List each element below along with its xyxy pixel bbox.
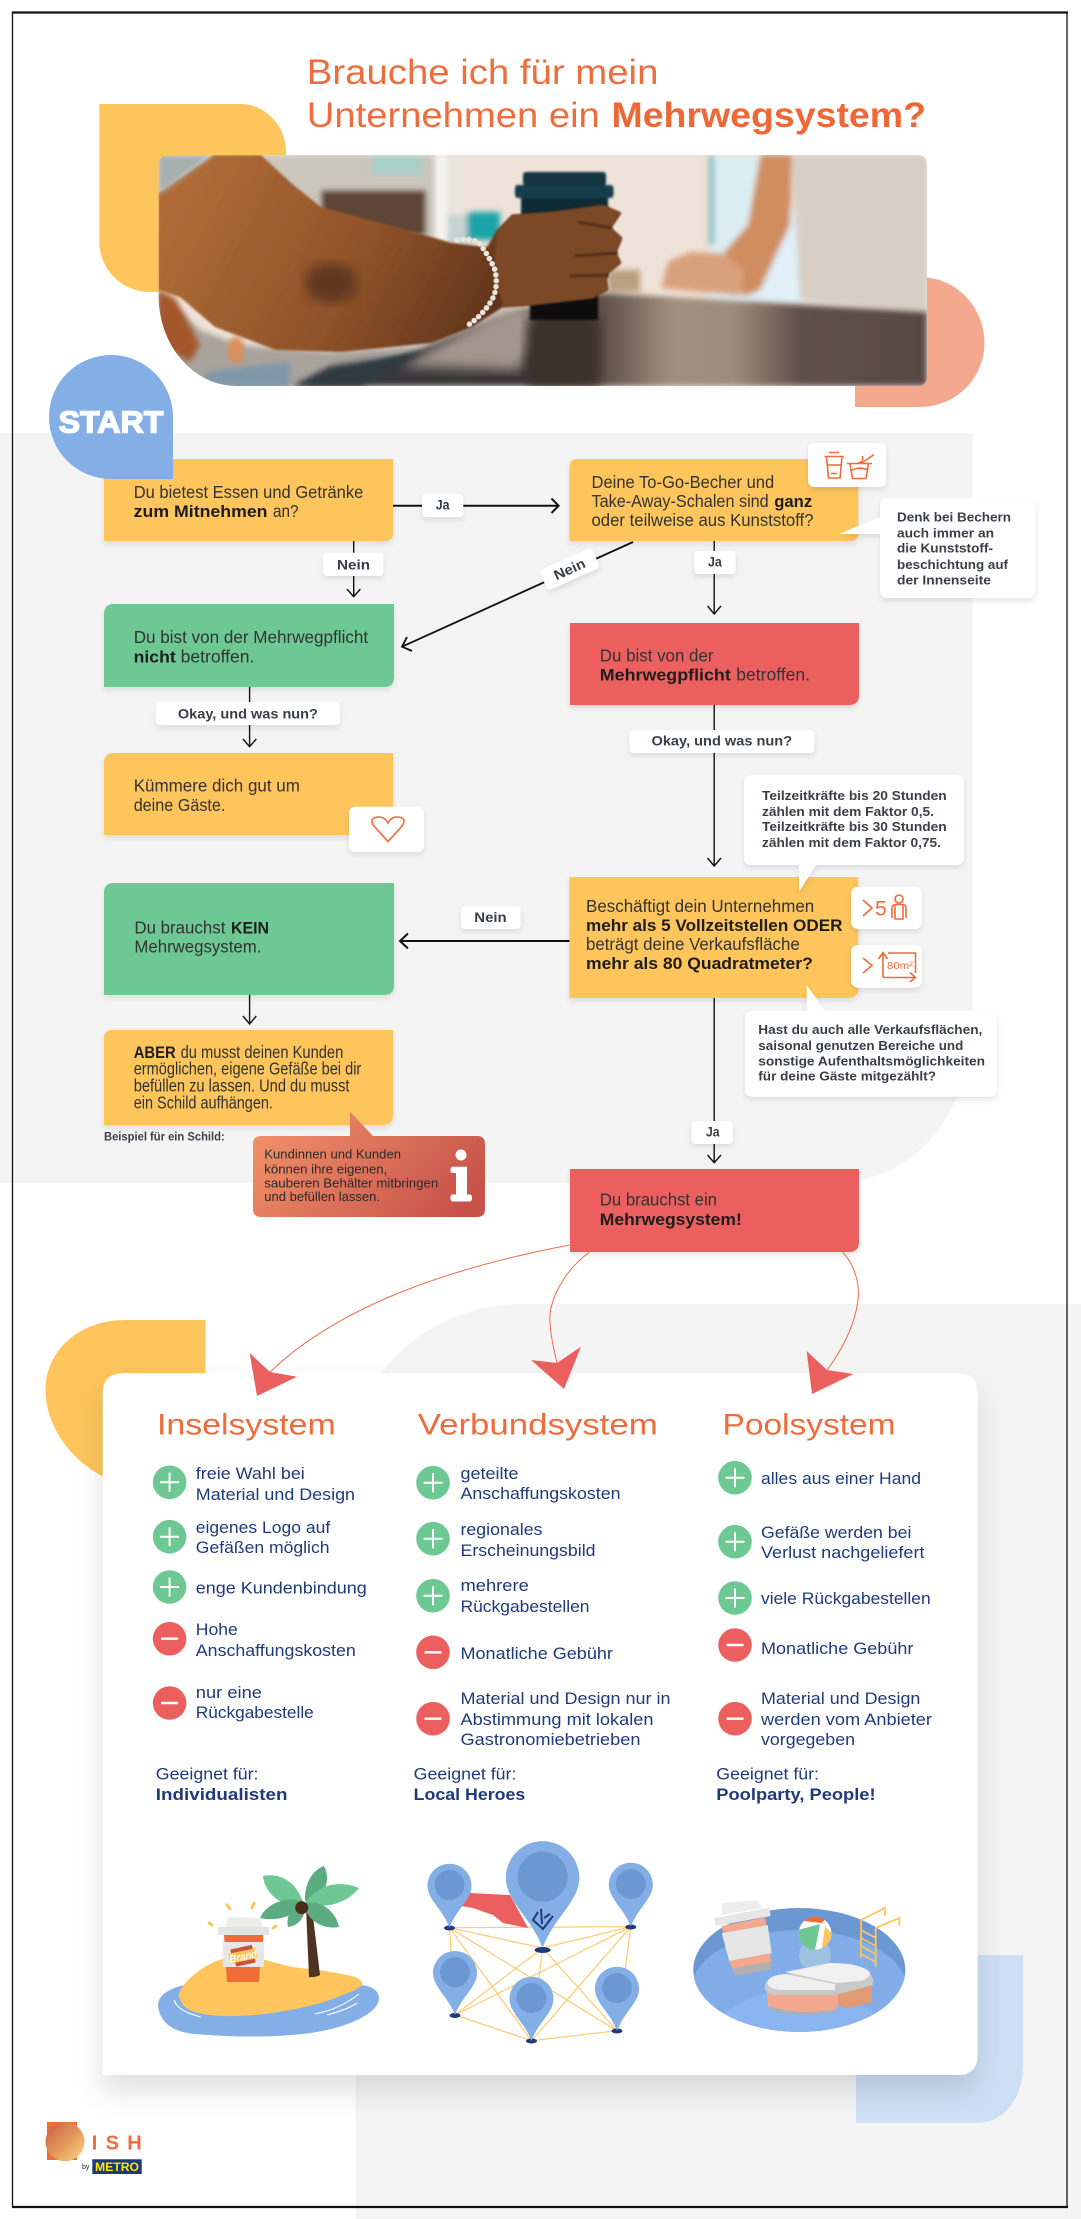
box: Mehrwegpflicht betroffen: Du bist von der [600, 646, 714, 666]
photo: hand holding reusable cup [158, 155, 928, 388]
heading: Verbundsystem [418, 1408, 658, 1441]
con: Gebühr: Monatliche Gebühr [460, 1644, 613, 1663]
box: Mehrwegpflicht betroffen [570, 623, 859, 705]
suitable for: Local Heroes [414, 1785, 525, 1804]
box: To-Go-Becher: ganz [774, 492, 812, 511]
box: Kümmere dich um Gäste [104, 753, 393, 835]
box: Beschäftigt dein Unternehmen: mehr als 80 Quadratmeter? [586, 954, 813, 973]
title [307, 53, 926, 135]
label: Okay, und was nun? left [156, 702, 340, 725]
example sign: Kundinnen und Kunden [264, 1146, 401, 1161]
connector lines and arrows of the flowchart [243, 498, 721, 1163]
suitable for: Individualisten [156, 1785, 288, 1804]
panel: systems card [103, 1373, 978, 2075]
cup [515, 172, 614, 320]
curved arrow to Poolsystem [807, 1252, 858, 1394]
pro: Kundenbindung: enge Kundenbindung [196, 1578, 367, 1597]
callout: Kunststoffbeschichtung [839, 498, 1035, 598]
logo: DISH by METRO: METRO [95, 2160, 139, 2174]
pro: freie Wahl: freie Wahl bei [196, 1464, 305, 1483]
start badge: START [59, 405, 163, 440]
box: Du brauchst ein Mehrwegsystem [570, 1169, 859, 1252]
box: kein Mehrwegsystem: Mehrwegsystem. [134, 937, 261, 957]
label: Ja: Ja [436, 496, 450, 512]
callout: Teilzeitkräfte: zählen mit dem Faktor 0,5. [762, 804, 934, 819]
con: Gebühr [718, 1628, 914, 1662]
caption: Beispiel für ein Schild: Beispiel für ein Schild: [104, 1131, 225, 1144]
label: Ja [692, 1121, 733, 1144]
pro: geteilte Kosten: geteilte [460, 1464, 518, 1483]
icon: more than 5 employees [851, 887, 922, 929]
label: Ja [694, 551, 736, 574]
callout: Teilzeitkräfte: Teilzeitkräfte bis 20 Stunden [762, 788, 947, 803]
con: Gebühr: Monatliche Gebühr [761, 1639, 914, 1658]
con: Abstimmung: Abstimmung mit lokalen [460, 1710, 654, 1729]
arm and hand [158, 155, 622, 352]
box: kein Mehrwegsystem: Du brauchst [134, 918, 226, 938]
pro: freie Wahl: Material und Design [196, 1485, 355, 1504]
logo: DISH by METRO: by [82, 2164, 90, 2171]
example sign [253, 1112, 485, 1217]
title: Unternehmen ein [307, 96, 600, 135]
pro: regional [416, 1520, 596, 1560]
con: Anschaffungskosten: Anschaffungskosten [196, 1641, 356, 1660]
icon: cup and bowl [808, 443, 886, 487]
callout: Verkaufsflächen: sonstige Aufenthaltsmöglichkeiten [758, 1054, 985, 1069]
pro: nachgeliefert: Gefäße werden bei [761, 1523, 911, 1542]
column: Poolsystem [716, 1408, 932, 1804]
box: ABER eigene Gefäße [104, 1030, 393, 1125]
box: Essen und Getränke [104, 459, 393, 541]
callout: Kunststoffbeschichtung: auch immer an [897, 526, 994, 541]
con: eine Rückgabestelle: nur eine [196, 1683, 262, 1702]
suitable for: Geeignet für: [716, 1765, 819, 1784]
con: Abstimmung: Gastronomiebetrieben [460, 1730, 640, 1749]
callout: Kunststoffbeschichtung: Denk bei Bechern [897, 510, 1011, 525]
callout: Teilzeitkräfte: Teilzeitkräfte bis 30 Stunden [762, 819, 947, 834]
box: ABER eigene Gefäße: ABER [134, 1043, 176, 1062]
con: Anschaffungskosten [153, 1620, 356, 1660]
box: kein Mehrwegsystem [104, 883, 394, 995]
title: Brauche ich für mein [307, 53, 658, 92]
suitable for: Geeignet für: [156, 1765, 258, 1784]
label: Ja: Ja [706, 1124, 720, 1140]
pro: regional: regionales [460, 1520, 542, 1539]
box: kein Mehrwegsystem: KEIN [231, 919, 269, 938]
box: ABER eigene Gefäße: ermöglichen, eigene Gefäße bei dir [134, 1058, 362, 1078]
box: ABER eigene Gefäße: du musst deinen Kunden [181, 1042, 343, 1062]
pro: geteilte Kosten [416, 1464, 620, 1503]
logo: DISH by METRO [46, 2122, 142, 2174]
callout: Verkaufsflächen: saisonal genutzen Bereiche und [758, 1038, 963, 1053]
pro: aus einer Hand: alles aus einer Hand [761, 1469, 921, 1488]
example sign: sauberen Behälter mitbringen [264, 1175, 438, 1190]
icon: more than 5 employees: 5 [875, 898, 887, 920]
box: ABER eigene Gefäße: befüllen zu lassen. Und du musst [134, 1076, 350, 1096]
pro: viele Rückgabestellen [718, 1581, 931, 1615]
label: Ja: Ja [708, 554, 722, 570]
example sign: und befüllen lassen. [264, 1189, 380, 1204]
callout: Teilzeitkräfte [744, 775, 964, 892]
con: Anbieter: vorgegeben [761, 1730, 855, 1749]
callout: Kunststoffbeschichtung: beschichtung auf [897, 557, 1009, 572]
start badge [49, 355, 173, 479]
pro: eigenes Logo: Gefäßen möglich [196, 1538, 330, 1557]
label: Nein: Nein [337, 556, 370, 572]
pro: aus einer Hand [718, 1461, 921, 1494]
label: Nein [323, 553, 383, 576]
pro: mehrere Rückgabestellen [416, 1576, 590, 1616]
curved arrow to Verbundsystem [531, 1252, 590, 1389]
label: Nein: Nein [474, 909, 507, 925]
pro: eigenes Logo: eigenes Logo auf [196, 1518, 330, 1537]
box: To-Go-Becher: oder teilweise aus Kunststoff? [592, 510, 814, 530]
illustration: island with cup and palm [158, 1866, 379, 2036]
background band: lower section [356, 1304, 1081, 2219]
con: Gebühr [416, 1636, 613, 1669]
callout: Verkaufsflächen: Hast du auch alle Verkaufsflächen, [758, 1022, 982, 1037]
pro: geteilte Kosten: Anschaffungskosten [460, 1484, 620, 1503]
bracelet [457, 240, 496, 327]
label: Okay, und was nun? right [629, 730, 814, 753]
con: Anbieter [718, 1689, 932, 1749]
label: Okay, und was nun? right: Okay, und was nun? [652, 733, 792, 749]
heading: Inselsystem [157, 1408, 336, 1441]
box: Du brauchst ein Mehrwegsystem: Mehrwegsystem! [600, 1210, 742, 1229]
pro: nachgeliefert: Verlust nachgeliefert [761, 1543, 925, 1562]
logo: DISH by METRO: ISH [92, 2132, 142, 2154]
box: Beschäftigt dein Unternehmen: Beschäftigt dein Unternehmen [586, 896, 814, 916]
box: Essen und Getränke: an? [273, 501, 298, 521]
curved arrow to Inselsystem [250, 1245, 570, 1396]
callout: Verkaufsflächen [745, 985, 997, 1097]
label: Okay, und was nun? left: Okay, und was nun? [178, 705, 318, 721]
box: To-Go-Becher [570, 459, 858, 541]
label: Nein diagonal: Nein [551, 555, 588, 583]
background band: flowchart [0, 433, 973, 1183]
con: eine Rückgabestelle: Rückgabestelle [196, 1703, 314, 1722]
box: Du brauchst ein Mehrwegsystem: Du brauchst ein [600, 1190, 717, 1210]
decorative blue shape [856, 1955, 1023, 2123]
con: Abstimmung [416, 1689, 670, 1749]
callout: Kunststoffbeschichtung: die Kunststoff- [897, 541, 993, 556]
suitable for [414, 1765, 525, 1804]
suitable for [716, 1765, 876, 1804]
label: Nein diagonal [539, 547, 600, 591]
label: Nein [461, 906, 520, 929]
con: Anbieter: werden vom Anbieter [760, 1710, 932, 1729]
box: To-Go-Becher: Deine To-Go-Becher und [592, 472, 774, 492]
title: Mehrwegsystem? [612, 96, 926, 135]
pro: nachgeliefert [718, 1523, 925, 1562]
con: Anbieter: Material und Design [761, 1689, 920, 1708]
box: nicht betroffen: Du bist von der Mehrwegpflicht [134, 627, 368, 647]
pro: freie Wahl [153, 1464, 355, 1504]
pro: Kundenbindung [153, 1570, 367, 1604]
box: nicht betroffen: nicht [134, 648, 176, 667]
box: Beschäftigt dein Unternehmen [570, 877, 858, 998]
table [291, 293, 927, 386]
box: Beschäftigt dein Unternehmen: beträgt deine Verkaufsfläche [586, 934, 800, 954]
callout: Verkaufsflächen: für deine Gäste mitgezählt? [758, 1069, 936, 1084]
decorative salmon shape behind photo [855, 277, 984, 407]
decorative yellow shape [46, 1320, 205, 1477]
box: Mehrwegpflicht betroffen: Mehrwegpflicht [600, 666, 731, 685]
pro: eigenes Logo [153, 1518, 330, 1557]
callout: Teilzeitkräfte: zählen mit dem Faktor 0,75. [762, 835, 941, 850]
box: nicht betroffen: betroffen. [181, 647, 254, 667]
box: ABER eigene Gefäße: ein Schild aufhängen. [134, 1092, 273, 1112]
illustration: island with cup and palm: Brand [228, 1948, 259, 1966]
pro: regional: Erscheinungsbild [460, 1541, 596, 1560]
box: Beschäftigt dein Unternehmen: mehr als 5 Vollzeitstellen ODER [586, 916, 842, 935]
con: eine Rückgabestelle [153, 1683, 314, 1722]
pro: mehrere Rückgabestellen: mehrere [460, 1576, 529, 1595]
icon: more than 80 square meters [851, 945, 922, 988]
decorative yellow shape behind photo [99, 104, 286, 292]
callout: Kunststoffbeschichtung: der Innenseite [897, 573, 991, 588]
label: Ja [422, 494, 463, 517]
con: Abstimmung: Material und Design nur in [460, 1689, 670, 1708]
example sign: können ihre eigenen, [264, 1161, 387, 1176]
pro: viele Rückgabestellen: viele Rückgabestellen [761, 1589, 931, 1608]
box: To-Go-Becher: Take-Away-Schalen sind [592, 491, 769, 511]
box: Essen und Getränke: zum Mitnehmen [134, 502, 268, 521]
column: Inselsystem [153, 1408, 367, 1804]
box: Essen und Getränke: Du bietest Essen und Getränke [134, 482, 363, 502]
heading: Poolsystem [722, 1408, 896, 1441]
suitable for: Geeignet für: [414, 1765, 516, 1784]
icon: more than 80 square meters: 80m² [887, 960, 914, 972]
illustration: connected map pins [428, 1841, 653, 2044]
pro: mehrere Rückgabestellen: Rückgabestellen [460, 1597, 590, 1616]
box: nicht betroffen [104, 604, 394, 687]
suitable for [156, 1765, 288, 1804]
icon: heart [349, 807, 424, 852]
box: Kümmere dich um Gäste: Kümmere dich gut um [134, 776, 300, 796]
box: Kümmere dich um Gäste: deine Gäste. [134, 795, 225, 815]
lower-left blurred area [158, 290, 430, 386]
column: Verbundsystem [414, 1408, 670, 1804]
box: Mehrwegpflicht betroffen: betroffen. [736, 665, 810, 685]
suitable for: Poolparty, People! [716, 1785, 876, 1804]
con: Anschaffungskosten: Hohe [196, 1620, 238, 1639]
illustration: pool with cup, ball and lunch box [693, 1900, 906, 2032]
